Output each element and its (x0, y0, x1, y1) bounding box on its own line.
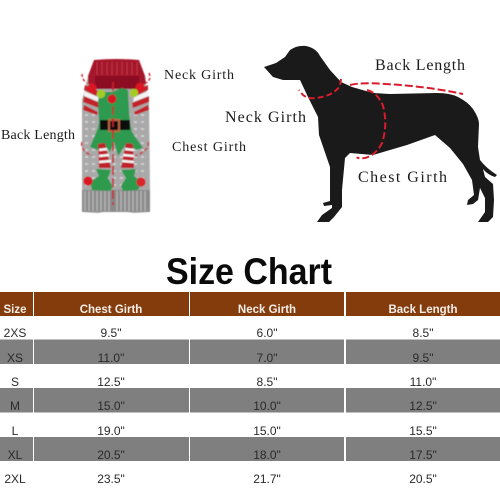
row L: 19.0" (97, 424, 125, 438)
row M: 12.5" (409, 399, 437, 413)
back length dashed line (350, 83, 463, 94)
row S: S (11, 375, 19, 389)
sweater body (82, 77, 150, 213)
row XL: 18.0" (253, 448, 281, 462)
row 2XL: 2XL (4, 472, 26, 486)
table header row: Back Length (388, 304, 458, 316)
red zipper stripe (112, 82, 114, 205)
row XL (8, 448, 437, 462)
sweater illustration (82, 59, 150, 213)
row S: 11.0" (410, 375, 436, 389)
elf striped legs (98, 143, 111, 168)
sweater red collar (88, 59, 146, 89)
row M: M (10, 399, 20, 413)
elf belt (100, 120, 130, 130)
row 2XL: 20.5" (409, 472, 437, 486)
dog silhouette diagram (264, 46, 497, 222)
table header row: Chest Girth (80, 304, 142, 316)
sweater knit texture (85, 115, 148, 185)
row XS: 11.0" (98, 351, 124, 365)
row 2XS: 8.5" (413, 326, 433, 340)
row XL: 20.5" (97, 448, 125, 462)
size chart table (0, 292, 500, 486)
row M (10, 399, 437, 413)
label: chest girth on sweater: Chest Girth (172, 140, 246, 155)
neck girth dashed line (299, 79, 341, 98)
grey row bands (0, 340, 500, 461)
label: back length on sweater: Back Length (1, 128, 75, 143)
row L: 15.5" (409, 424, 437, 438)
dog silhouette (264, 46, 497, 222)
table header row: Size (3, 304, 27, 316)
row XS (7, 351, 433, 365)
row XS: XS (7, 351, 23, 365)
label: neck girth on sweater: Neck Girth (164, 68, 234, 83)
row S: 8.5" (257, 375, 277, 389)
label: neck girth on dog: Neck Girth (225, 109, 306, 126)
row 2XS: 6.0" (257, 326, 277, 340)
chest girth dashed line (357, 90, 385, 158)
row XS: 9.5" (413, 351, 433, 365)
title: Size Chart (166, 251, 332, 292)
row S: 12.5" (97, 375, 125, 389)
row 2XL (4, 472, 437, 486)
row 2XL: 21.7" (253, 472, 281, 486)
row L: L (12, 424, 19, 438)
row 2XS: 9.5" (101, 326, 121, 340)
row 2XS (4, 326, 433, 340)
row L (12, 424, 437, 438)
sweater bottom cuff (82, 190, 150, 212)
row L: 15.0" (253, 424, 281, 438)
pom poms (87, 83, 97, 93)
table header row (0, 292, 500, 316)
row XL: XL (8, 448, 23, 462)
row 2XS: 2XS (4, 326, 26, 340)
table header row: Neck Girth (238, 304, 296, 316)
elf belt buckle (109, 120, 119, 131)
label: chest girth on dog: Chest Girth (358, 169, 447, 186)
row S (11, 375, 436, 389)
chest girth dashed arc on sweater (82, 142, 148, 156)
elf green suit (90, 88, 143, 156)
row 2XL: 23.5" (97, 472, 125, 486)
label: back length on dog: Back Length (375, 57, 465, 74)
row M: 15.0" (97, 399, 125, 413)
row XS: 7.0" (257, 351, 277, 365)
red and white striped sleeves (83, 85, 100, 115)
row XL: 17.5" (409, 448, 437, 462)
row M: 10.0" (253, 399, 281, 413)
elf green boots (90, 169, 113, 191)
neck girth dashed marks on sweater (82, 73, 150, 83)
